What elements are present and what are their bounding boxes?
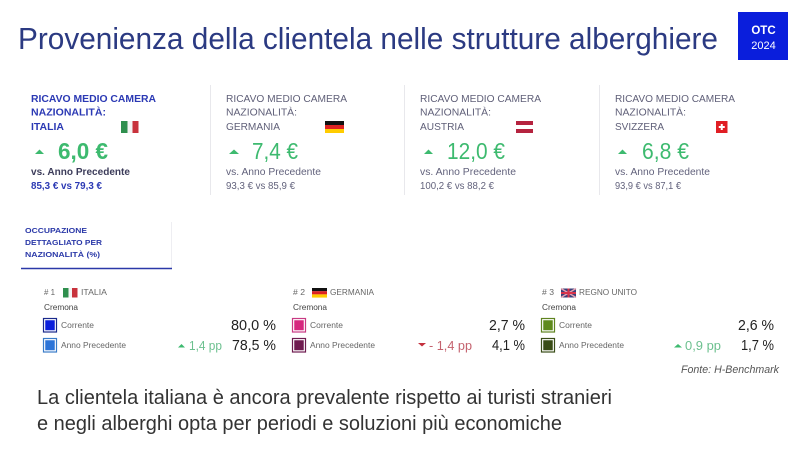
title: Provenienza della clientela nelle strutture alberghiere	[18, 21, 718, 56]
icon: up arrow	[178, 344, 185, 348]
panel: ricavo Italia: vs. Anno Precedente	[31, 167, 130, 178]
takeaway text	[37, 387, 612, 435]
panel: occupazione Germania: Cremona	[293, 303, 328, 312]
icon: up arrow	[618, 150, 627, 154]
takeaway text: La clientela italiana è ancora prevalente rispetto ai turisti stranieri	[37, 387, 612, 409]
legend swatch: corrente	[542, 318, 554, 332]
takeaway text: e negli alberghi opta per periodi e soluzioni più economiche	[37, 413, 562, 435]
panel: occupazione Germania: 2,7 %	[489, 318, 525, 334]
badge: OTC 2024: OTC	[751, 25, 776, 37]
panel: ricavo Italia: NAZIONALITÀ:	[31, 106, 106, 118]
panel: ricavo Italia: 6,0 €	[58, 138, 108, 164]
icon: down arrow	[418, 343, 426, 346]
legend swatch: anno precedente	[44, 338, 56, 352]
panel: occupazione Italia: 1,4 pp	[189, 338, 222, 353]
panel: occupazione Germania: Corrente	[310, 321, 344, 330]
panel: occupazione Italia: Cremona	[44, 303, 79, 312]
panel: ricavo Svizzera: RICAVO MEDIO CAMERA	[615, 93, 735, 105]
panel: ricavo Svizzera: NAZIONALITÀ:	[615, 106, 686, 118]
panel: ricavo Svizzera: vs. Anno Precedente	[615, 167, 710, 178]
panel: ricavo Svizzera: SVIZZERA	[615, 121, 664, 133]
icon: flag Germany	[325, 121, 344, 133]
badge: OTC 2024: 2024	[751, 40, 776, 52]
legend swatch: corrente	[44, 318, 56, 332]
icon: up arrow	[35, 150, 44, 154]
icon: up arrow	[424, 150, 433, 154]
panel: ricavo Italia: 85,3 € vs 79,3 €	[31, 181, 102, 192]
panel: ricavo Germania	[210, 85, 347, 195]
tab: occupazione heading: DETTAGLIATO PER	[25, 238, 103, 247]
panel: occupazione Germania: GERMANIA	[330, 288, 375, 297]
panel: occupazione Italia	[44, 288, 276, 354]
panel: ricavo Svizzera: 93,9 € vs 87,1 €	[615, 181, 681, 192]
panel: occupazione Regno Unito: # 3	[542, 288, 555, 297]
panel: occupazione Regno Unito	[542, 288, 774, 354]
panel: occupazione Regno Unito: 2,6 %	[738, 318, 774, 334]
panel: occupazione Italia: Corrente	[61, 321, 95, 330]
icon: flag Italy	[121, 121, 138, 133]
panel: ricavo Austria: 100,2 € vs 88,2 €	[420, 181, 494, 192]
panel: ricavo Svizzera: 6,8 €	[642, 138, 689, 164]
panel: ricavo Germania: RICAVO MEDIO CAMERA	[226, 93, 347, 105]
icon: up arrow	[229, 150, 239, 154]
panel: occupazione Italia: ITALIA	[81, 288, 108, 297]
panel: occupazione Regno Unito: Cremona	[542, 303, 577, 312]
icon: flag Germany	[312, 288, 327, 298]
panel: ricavo Germania: GERMANIA	[226, 121, 280, 133]
legend swatch: anno precedente	[542, 338, 554, 352]
panel: occupazione Germania	[292, 288, 525, 354]
panel: occupazione Italia: 80,0 %	[231, 318, 276, 334]
tab: occupazione heading	[21, 222, 172, 268]
tab: occupazione heading: OCCUPAZIONE	[25, 226, 87, 235]
panel: ricavo Austria: AUSTRIA	[420, 121, 464, 133]
panel: occupazione Regno Unito: REGNO UNITO	[579, 288, 637, 297]
panel: ricavo Austria	[404, 85, 541, 195]
panel: occupazione Regno Unito: Corrente	[559, 321, 593, 330]
panel: occupazione Italia: Anno Precedente	[61, 341, 127, 350]
icon: flag Switzerland	[716, 121, 728, 133]
icon: flag Austria	[516, 121, 533, 133]
icon: flag UK	[561, 288, 576, 298]
panel: occupazione Germania: # 2	[293, 288, 306, 297]
legend swatch: corrente	[292, 318, 306, 332]
panel: occupazione Italia: # 1	[44, 288, 56, 297]
panel: occupazione Germania: - 1,4 pp	[429, 338, 472, 353]
panel: occupazione Italia: 78,5 %	[232, 338, 276, 354]
panel: ricavo Germania: NAZIONALITÀ:	[226, 106, 297, 118]
panel: ricavo Italia: RICAVO MEDIO CAMERA	[31, 93, 156, 105]
panel: ricavo Svizzera	[600, 85, 735, 195]
panel: ricavo Germania: 93,3 € vs 85,9 €	[226, 181, 295, 192]
panel: ricavo Italia: ITALIA	[31, 121, 64, 133]
panel: occupazione Germania: Anno Precedente	[310, 341, 376, 350]
source note: Fonte: H-Benchmark	[681, 364, 779, 376]
panel: occupazione Germania: 4,1 %	[492, 338, 525, 354]
panel: ricavo Germania: 7,4 €	[252, 138, 298, 164]
panel: ricavo Austria: 12,0 €	[447, 138, 505, 164]
panel: ricavo Austria: RICAVO MEDIO CAMERA	[420, 93, 541, 105]
panel: occupazione Regno Unito: Anno Precedente	[559, 341, 625, 350]
panel: ricavo Austria: NAZIONALITÀ:	[420, 106, 491, 118]
icon: flag Italy	[63, 288, 78, 298]
panel: ricavo Italia	[31, 93, 156, 192]
panel: occupazione Regno Unito: 1,7 %	[741, 338, 774, 354]
panel: ricavo Germania: vs. Anno Precedente	[226, 167, 321, 178]
tab: occupazione heading: NAZIONALITÀ (%)	[25, 250, 101, 259]
icon: up arrow	[674, 344, 682, 348]
panel: ricavo Austria: vs. Anno Precedente	[420, 167, 516, 178]
panel: occupazione Regno Unito: 0,9 pp	[685, 338, 721, 353]
legend swatch: anno precedente	[292, 338, 306, 352]
badge: OTC 2024	[738, 12, 788, 60]
